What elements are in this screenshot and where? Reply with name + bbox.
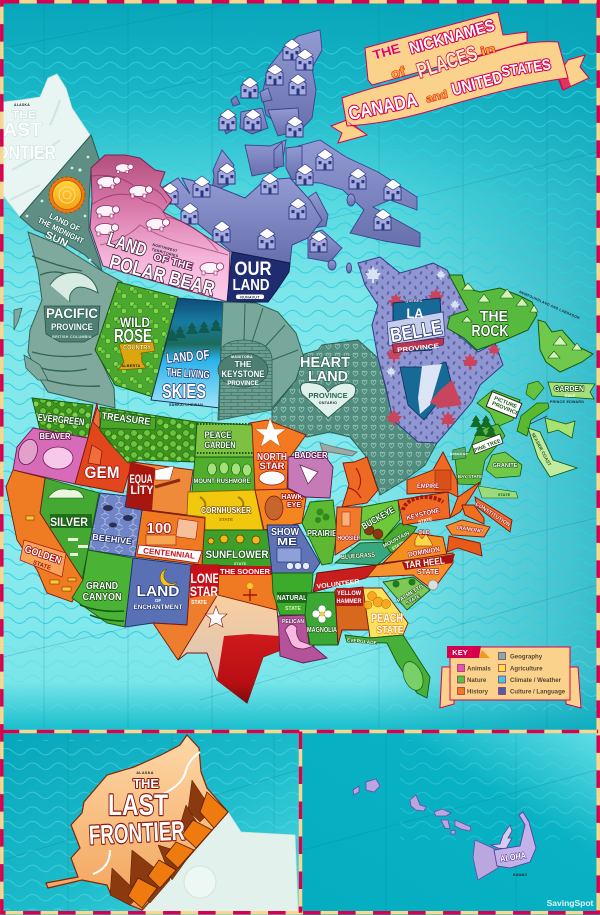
label: the last frontier: ALASKA bbox=[136, 771, 154, 775]
label: pacific province: PROVINCE bbox=[51, 322, 93, 333]
state: Utah, Beehive: BEEHIVE bbox=[92, 532, 133, 546]
region: Nova Scotia bbox=[517, 403, 577, 477]
key entries: column one: History bbox=[467, 688, 489, 696]
icons: polar bears bbox=[95, 164, 224, 275]
region: Maine and New England: GREEN MT bbox=[450, 452, 468, 456]
title text: STATES bbox=[500, 56, 552, 81]
group: United States western states bbox=[6, 398, 281, 703]
key entries: column two: Agriculture bbox=[510, 666, 543, 672]
state: Nebraska, Cornhusker bbox=[187, 490, 263, 530]
label: keystone province: MANITOBA bbox=[231, 355, 253, 359]
state: Georgia, Peach: STATE bbox=[376, 624, 404, 636]
panel: Nunavut, Our Land: LAND bbox=[232, 277, 270, 294]
state: Tennessee, Volunteer bbox=[313, 563, 383, 592]
state: New Mexico, Land of Enchantment: ENCHANTMENT bbox=[134, 604, 183, 611]
state: California, Golden bbox=[6, 470, 83, 602]
panel: Nunavut, Our Land bbox=[227, 252, 290, 302]
region: Prince Edward Island bbox=[526, 381, 595, 404]
label: land of the polar bear bbox=[105, 229, 217, 301]
state: Kentucky, Bluegrass bbox=[335, 542, 392, 565]
state: Nebraska, Cornhusker: CORNHUSKER bbox=[201, 506, 251, 515]
state: Oklahoma, Sooner: THE SOONER bbox=[220, 567, 271, 576]
label: wild rose country: COUNTRY bbox=[123, 346, 151, 352]
icon: heart with Ontario label: ONTARIO bbox=[319, 401, 337, 405]
panel: Nunavut arctic islands bbox=[212, 30, 420, 273]
state: Idaho, Gem: GEM bbox=[84, 463, 120, 482]
state: Pennsylvania, Keystone: KEYSTONE bbox=[406, 507, 441, 522]
label: keystone province bbox=[218, 353, 268, 387]
key entries: column two: Culture / Language bbox=[510, 688, 566, 696]
label: the rock: ROCK bbox=[472, 323, 509, 340]
region: Prince Edward Island: GULF bbox=[565, 393, 576, 398]
state: North Dakota, Peace Garden: GARDEN bbox=[204, 440, 236, 451]
panel: British Columbia, Pacific Province bbox=[14, 232, 122, 408]
label: the rock bbox=[472, 308, 509, 340]
region: New Brunswick: PICTURE bbox=[493, 396, 518, 411]
panel: Nunavut, Our Land: NUNAVUT bbox=[240, 295, 260, 299]
title text: THE bbox=[371, 40, 402, 63]
state: New York, Empire: EMPIRE bbox=[417, 483, 440, 490]
ribbon ends bbox=[440, 667, 581, 708]
label: Hawaii: HAWAII bbox=[513, 873, 527, 877]
key entries: column two bbox=[498, 652, 566, 696]
group: United States eastern states bbox=[335, 452, 512, 698]
state: Illinois, Prairie: PRAIRIE bbox=[307, 529, 337, 538]
panel: Newfoundland and Labrador, The Rock bbox=[447, 275, 593, 372]
state: Pennsylvania, Keystone bbox=[398, 492, 450, 525]
label: pacific province: BRITISH COLUMBIA bbox=[52, 335, 92, 339]
label: land of the midnight sun: LAND OF bbox=[48, 211, 81, 234]
state: Minnesota, North Star: NORTH bbox=[257, 451, 287, 463]
state: New York, Empire bbox=[407, 452, 458, 497]
state: Oklahoma, Sooner bbox=[218, 566, 277, 610]
label: land of the midnight sun: THE MIDNIGHT bbox=[36, 216, 85, 246]
state: Virginia, Old Dominion: OLD bbox=[418, 530, 430, 536]
key entries: column one: Nature bbox=[467, 677, 487, 684]
label: land of the living skies: SKIES bbox=[162, 381, 206, 403]
state: New Mexico, Land of Enchantment: OF bbox=[155, 598, 161, 603]
panel: Ontario, Heartland Province bbox=[272, 340, 437, 495]
state: Indiana, Hoosier bbox=[335, 507, 362, 555]
state: Virginia, Old Dominion: DOMINION bbox=[408, 546, 440, 559]
region: Maine and New England: BAY STATE bbox=[458, 474, 482, 479]
panel: Ontario, Heartland Province: LAND bbox=[308, 368, 348, 385]
ribbon: aloha: ALOHA bbox=[499, 850, 527, 864]
region: faded Alaska on main map bbox=[0, 74, 90, 217]
region: Nova Scotia: SEASIDE COAST bbox=[530, 432, 552, 467]
sea background: main map bbox=[0, 0, 600, 732]
panel: Alaska inset bbox=[0, 731, 300, 915]
label: the last frontier bbox=[88, 771, 186, 850]
panel: Hawaii inset bbox=[300, 731, 600, 915]
label: wild rose country: WILD bbox=[120, 314, 150, 330]
label: land of the polar bear: LAND bbox=[105, 229, 149, 262]
state: mid-Atlantic orange ribbons bbox=[446, 482, 512, 556]
icon: midnight sun bbox=[49, 177, 85, 213]
ribbon: aloha bbox=[494, 812, 536, 868]
title banner bbox=[331, 12, 589, 143]
state: Michigan, Wolverine bbox=[342, 457, 378, 507]
faded Alaska label bbox=[0, 103, 56, 164]
state: Colorado, 100 Centennial: 100 bbox=[146, 520, 172, 537]
state: South Carolina, Palmetto: PALMETTO bbox=[396, 583, 425, 605]
state: Minnesota, North Star bbox=[250, 418, 306, 490]
state: North Carolina, Tar Heel: TAR HEEL bbox=[404, 556, 446, 571]
faded neighbouring land bbox=[142, 812, 298, 912]
icons: maple leaves bbox=[386, 288, 500, 428]
icon: shaka hand bbox=[491, 825, 512, 849]
label: land of the midnight sun: YUKON bbox=[46, 241, 60, 251]
state: Wisconsin, Badger bbox=[288, 443, 357, 498]
key entries: column one: Animals bbox=[467, 666, 491, 672]
region: Maine and New England: GRANITE bbox=[493, 463, 518, 469]
label: land of the polar bear: NORTHWEST bbox=[152, 243, 178, 253]
state: Louisiana, Pelican: PELICAN bbox=[282, 619, 304, 625]
title text: of bbox=[389, 63, 407, 82]
region: Prince Edward Island: PRINCE EDWARD bbox=[550, 400, 584, 404]
label: province caption: NEWFOUNDLAND AND LABRADOR bbox=[518, 290, 580, 320]
icons: Hawaiian islands bbox=[353, 779, 498, 880]
title text: and bbox=[425, 89, 449, 105]
label: wild rose country bbox=[114, 314, 155, 370]
state: Louisiana, Pelican bbox=[278, 615, 327, 663]
state: Kansas, Sunflower: SUNFLOWER bbox=[206, 549, 269, 561]
icon: La Belle crest: QUEBEC bbox=[405, 299, 423, 303]
state: Florida, Everglade bbox=[345, 635, 430, 698]
state: North Carolina, Tar Heel: STATE bbox=[417, 569, 439, 576]
faded Alaska label: THE bbox=[12, 110, 36, 121]
state: Washington, Evergreen bbox=[32, 398, 93, 438]
state: Texas, Lone Star bbox=[153, 565, 281, 703]
icons: cabins and pines bbox=[110, 780, 212, 905]
state: Kentucky, Bluegrass: BLUEGRASS bbox=[341, 552, 376, 561]
state: Colorado, 100 Centennial: CENTENNIAL bbox=[143, 546, 195, 561]
title text: NICKNAMES bbox=[407, 17, 497, 58]
panel: Quebec, La Belle Province bbox=[358, 257, 503, 443]
panel: Alberta, Wild Rose Country bbox=[95, 282, 178, 397]
region: New Brunswick: PROVINCE bbox=[491, 401, 520, 417]
state: Ohio, Buckeye: BUCKEYE bbox=[360, 505, 396, 531]
state: Arkansas, Natural: STATE bbox=[285, 606, 301, 612]
key tab: KEY bbox=[452, 648, 468, 657]
icon: heart with Ontario label: PROVINCE bbox=[308, 391, 348, 400]
key entries: column two: Climate / Weather bbox=[510, 677, 562, 684]
label: keystone province: PROVINCE bbox=[227, 381, 259, 387]
state: Washington, Evergreen: EVERGREEN bbox=[37, 413, 85, 428]
state: South Dakota, Mount Rushmore: MOUNT RUSHMORE bbox=[194, 478, 251, 485]
state: Mississippi, Magnolia: MAGNOLIA bbox=[307, 627, 337, 634]
state: Alabama, Yellowhammer: HAMMER bbox=[336, 598, 362, 605]
state: Arizona, Grand Canyon: CANYON bbox=[82, 591, 122, 603]
brand: SavingSpot: SavingSpot bbox=[547, 898, 594, 908]
state: Nebraska, Cornhusker: STATE bbox=[219, 517, 233, 522]
state: North Dakota, Peace Garden: PEACE bbox=[204, 430, 232, 441]
icon: Quebec flag bbox=[400, 362, 462, 420]
state: Missouri, Show Me: ME bbox=[277, 536, 297, 548]
state: Wyoming, Equality: LITY bbox=[130, 483, 154, 497]
state: West Virginia, Mountain: MOUNTAIN bbox=[382, 531, 411, 550]
faded Alaska label: ALASKA bbox=[14, 103, 30, 107]
ribbon: back and tails bbox=[331, 12, 589, 143]
label: the last frontier: FRONTIER bbox=[88, 816, 186, 850]
state: Iowa, Hawkeye bbox=[255, 489, 306, 530]
state: Arkansas, Natural bbox=[272, 573, 313, 615]
title text: UNITED bbox=[450, 68, 505, 99]
label: land of the living skies: LAND OF bbox=[166, 347, 210, 366]
state: Mississippi, Magnolia bbox=[305, 592, 338, 645]
panel: Nunavut, Our Land: OUR bbox=[234, 259, 272, 280]
state: Nevada, Silver: SILVER bbox=[50, 515, 88, 529]
state: Arizona, Grand Canyon: GRAND bbox=[86, 580, 118, 592]
label: keystone province: KEYSTONE bbox=[222, 369, 264, 380]
region: New Brunswick bbox=[477, 390, 522, 427]
state: Georgia, Peach bbox=[363, 588, 408, 638]
title text: CANADA bbox=[347, 90, 420, 125]
label: land of the polar bear: POLAR BEAR bbox=[107, 251, 217, 301]
state: Georgia, Peach: PEACH bbox=[371, 613, 403, 625]
icon: La Belle crest bbox=[387, 298, 445, 354]
state: Missouri, Show Me: SHOW bbox=[271, 526, 299, 538]
icon: La Belle crest: LA bbox=[406, 305, 424, 321]
state: Iowa, Hawkeye: EYE bbox=[287, 502, 301, 509]
state: South Carolina, Palmetto: STATE bbox=[405, 593, 422, 607]
group: United States central states bbox=[250, 418, 417, 663]
region: Maine and New England bbox=[450, 415, 522, 498]
region: Maine and New England: PINE TREE bbox=[474, 438, 502, 454]
state: Pennsylvania, Keystone: STATE bbox=[418, 516, 433, 525]
state: Illinois, Prairie bbox=[302, 500, 337, 565]
state: Wyoming, Equality: EQUA bbox=[130, 472, 153, 486]
state: California, Golden: STATE bbox=[32, 560, 52, 572]
state: Minnesota, North Star: STAR bbox=[260, 461, 285, 471]
label: wild rose country: ROSE bbox=[114, 326, 152, 346]
state: Arkansas, Natural: NATURAL bbox=[277, 595, 308, 602]
title text bbox=[347, 17, 552, 125]
legend: key bbox=[440, 646, 581, 708]
label: the last frontier: THE bbox=[133, 777, 159, 791]
label: land of the living skies: SASKATCHEWAN bbox=[169, 403, 203, 407]
state: Montana, Treasure bbox=[100, 407, 197, 463]
label: land of the polar bear: TERRITORIES bbox=[151, 248, 179, 259]
state: Alabama, Yellowhammer: YELLOW bbox=[337, 590, 362, 597]
region: Prince Edward Island: GARDEN bbox=[554, 384, 584, 393]
state: Kansas, Sunflower bbox=[202, 530, 273, 567]
state: mid-Atlantic orange ribbons: DIAMOND bbox=[456, 525, 483, 535]
label: land of the midnight sun: SUN bbox=[43, 229, 69, 250]
state: mid-Atlantic orange ribbons: CONSTITUTION bbox=[474, 501, 511, 528]
key entries: column one bbox=[458, 664, 491, 696]
panel: Northwest Territories, Land of the Polar Bear bbox=[90, 155, 230, 302]
state: South Carolina, Palmetto bbox=[383, 577, 430, 610]
label: pacific province: PACIFIC bbox=[46, 305, 98, 321]
state: Tennessee, Volunteer: VOLUNTEER bbox=[316, 578, 360, 591]
state: Oregon, Beaver: BEAVER bbox=[40, 432, 71, 441]
state: Indiana, Hoosier: HOOSIER bbox=[338, 535, 361, 542]
label: the rock: THE bbox=[480, 308, 508, 325]
panel: Ontario, Heartland Province: HEART bbox=[300, 354, 350, 371]
state: North Dakota, Peace Garden bbox=[195, 422, 255, 457]
label: wild rose country: ALBERTA bbox=[121, 364, 141, 368]
title text: PLACES bbox=[414, 42, 480, 83]
state: South Dakota, Mount Rushmore bbox=[192, 457, 255, 492]
state: New Mexico, Land of Enchantment: LAND bbox=[136, 583, 180, 600]
ribbon shadow folds bbox=[346, 78, 571, 135]
state: Montana, Treasure: TREASURE bbox=[101, 411, 151, 428]
label: pacific province bbox=[44, 305, 100, 342]
state: Colorado, 100 Centennial bbox=[135, 510, 205, 565]
state: Arizona, Grand Canyon bbox=[72, 550, 133, 627]
label: land of the midnight sun bbox=[30, 208, 89, 259]
state: Wyoming, Equality bbox=[125, 462, 193, 515]
title text: in bbox=[479, 41, 497, 59]
label: land of the polar bear: OF THE bbox=[152, 252, 194, 273]
label: keystone province: THE bbox=[234, 359, 252, 369]
state: California, Golden: GOLDEN bbox=[23, 544, 63, 567]
icons: snow-roofed houses bbox=[161, 39, 401, 252]
icon: La Belle crest: PROVINCE bbox=[397, 343, 440, 354]
label: the last frontier: LAST bbox=[108, 789, 168, 822]
state: Utah, Beehive bbox=[88, 493, 142, 557]
icon: heart with Ontario label bbox=[300, 382, 356, 418]
key tab bbox=[447, 646, 490, 658]
panel: Manitoba, Keystone Province bbox=[218, 302, 304, 420]
key entries: column two: Geography bbox=[510, 654, 543, 660]
state: Nevada, Silver bbox=[40, 478, 99, 580]
state: Oregon, Beaver bbox=[13, 428, 88, 484]
state: Texas, Lone Star: STATE bbox=[191, 600, 207, 606]
panel: Yukon, Land of the Midnight Sun bbox=[20, 135, 102, 271]
state: Texas, Lone Star: STAR bbox=[190, 583, 218, 599]
key panel bbox=[450, 647, 570, 700]
state: West Virginia, Mountain bbox=[382, 523, 417, 553]
state: Texas, Lone Star: LONE bbox=[190, 570, 220, 586]
label: land of the living skies: THE LIVING bbox=[166, 367, 210, 381]
state: Alabama, Yellowhammer bbox=[335, 587, 370, 645]
panel: Nunavut mainland bbox=[158, 39, 401, 263]
state: Kansas, Sunflower: STATE bbox=[234, 561, 247, 566]
state: Florida, Everglade: EVERGLADE bbox=[347, 637, 378, 647]
state: West Virginia, Mountain: STATE bbox=[391, 540, 406, 551]
label: land of the living skies bbox=[162, 347, 210, 407]
state: Idaho, Gem bbox=[75, 403, 132, 493]
state: Virginia, Old Dominion bbox=[383, 530, 447, 563]
state: New Mexico, Land of Enchantment bbox=[125, 558, 191, 627]
state: Iowa, Hawkeye: HAWK bbox=[281, 494, 303, 501]
panel: Saskatchewan, Land of the Living Skies bbox=[151, 298, 223, 408]
icon: La Belle crest: BELLE bbox=[389, 317, 444, 347]
state: Missouri, Show Me bbox=[267, 525, 320, 573]
region: Maine and New England: STATE bbox=[498, 492, 511, 497]
panel: Atlantic provinces bbox=[450, 381, 595, 498]
state: North Carolina, Tar Heel bbox=[367, 553, 455, 590]
state: Wisconsin, Badger: BADGER bbox=[294, 451, 328, 460]
